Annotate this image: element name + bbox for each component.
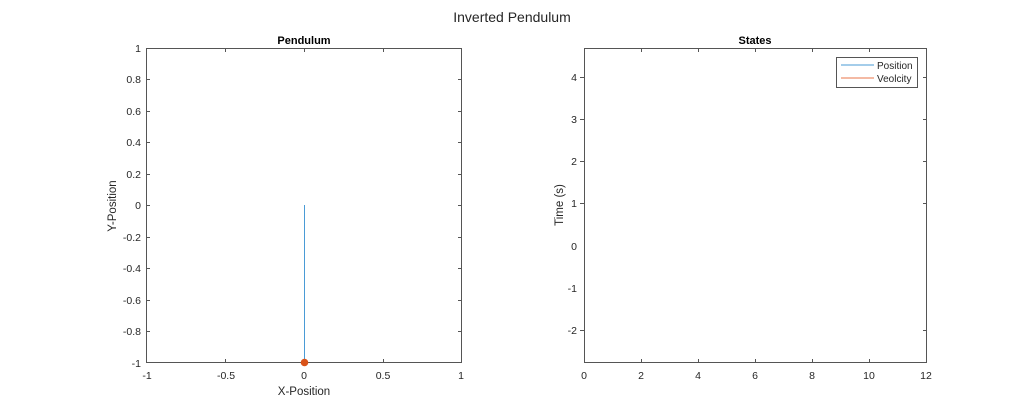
y tick labels: 0: [135, 200, 141, 212]
x tick labels: -0.5: [217, 370, 235, 382]
panel: states plot: [554, 35, 932, 382]
x tick labels: 6: [752, 370, 758, 382]
x tick labels: 0: [581, 370, 587, 382]
pendulum rod: [304, 205, 306, 362]
y tick labels: -1: [568, 283, 577, 295]
y tick labels: [568, 72, 577, 337]
y tick labels: 0.2: [126, 169, 141, 181]
x tick labels: 10: [863, 370, 875, 382]
y tick labels: 0.6: [126, 106, 141, 118]
y axis label: Time (s): [554, 184, 566, 226]
y tick labels: 1: [571, 198, 577, 210]
x tick labels: [142, 370, 464, 382]
legend: Position: [877, 61, 913, 72]
x tick labels: 1: [458, 370, 464, 382]
x tick labels: 2: [638, 370, 644, 382]
heading: States: States: [738, 35, 772, 47]
y tick labels: -0.6: [123, 295, 141, 307]
y axis label: Y-Position: [107, 180, 119, 232]
x tick labels: 0.5: [376, 370, 390, 382]
y tick labels: -0.8: [123, 326, 141, 338]
y tick labels: -0.4: [123, 263, 141, 275]
legend: [836, 58, 918, 88]
x tick labels: 4: [695, 370, 701, 382]
y tick labels: 1: [135, 43, 141, 55]
y tick labels: 0.4: [126, 137, 141, 149]
x tick labels: -1: [142, 370, 152, 382]
legend: Veolcity: [877, 74, 911, 85]
x tick labels: 0: [301, 370, 307, 382]
y tick labels: 0: [571, 241, 577, 253]
y tick labels: 4: [571, 72, 577, 84]
y tick labels: -2: [568, 325, 577, 337]
y tick labels: 2: [571, 156, 577, 168]
heading: Pendulum: Pendulum: [277, 35, 331, 47]
y tick labels: 0.8: [126, 74, 141, 86]
y tick labels: 3: [571, 114, 577, 126]
x tick labels: 8: [809, 370, 815, 382]
y tick labels: -1: [132, 358, 141, 370]
x tick labels: 12: [920, 370, 932, 382]
pendulum bob: [301, 359, 308, 366]
y tick labels: -0.2: [123, 232, 141, 244]
panel: pendulum plot: [107, 35, 464, 398]
x tick labels: [581, 370, 932, 382]
title: Inverted Pendulum: [453, 9, 571, 25]
x axis label: X-Position: [278, 386, 330, 398]
y tick labels: [123, 43, 141, 370]
